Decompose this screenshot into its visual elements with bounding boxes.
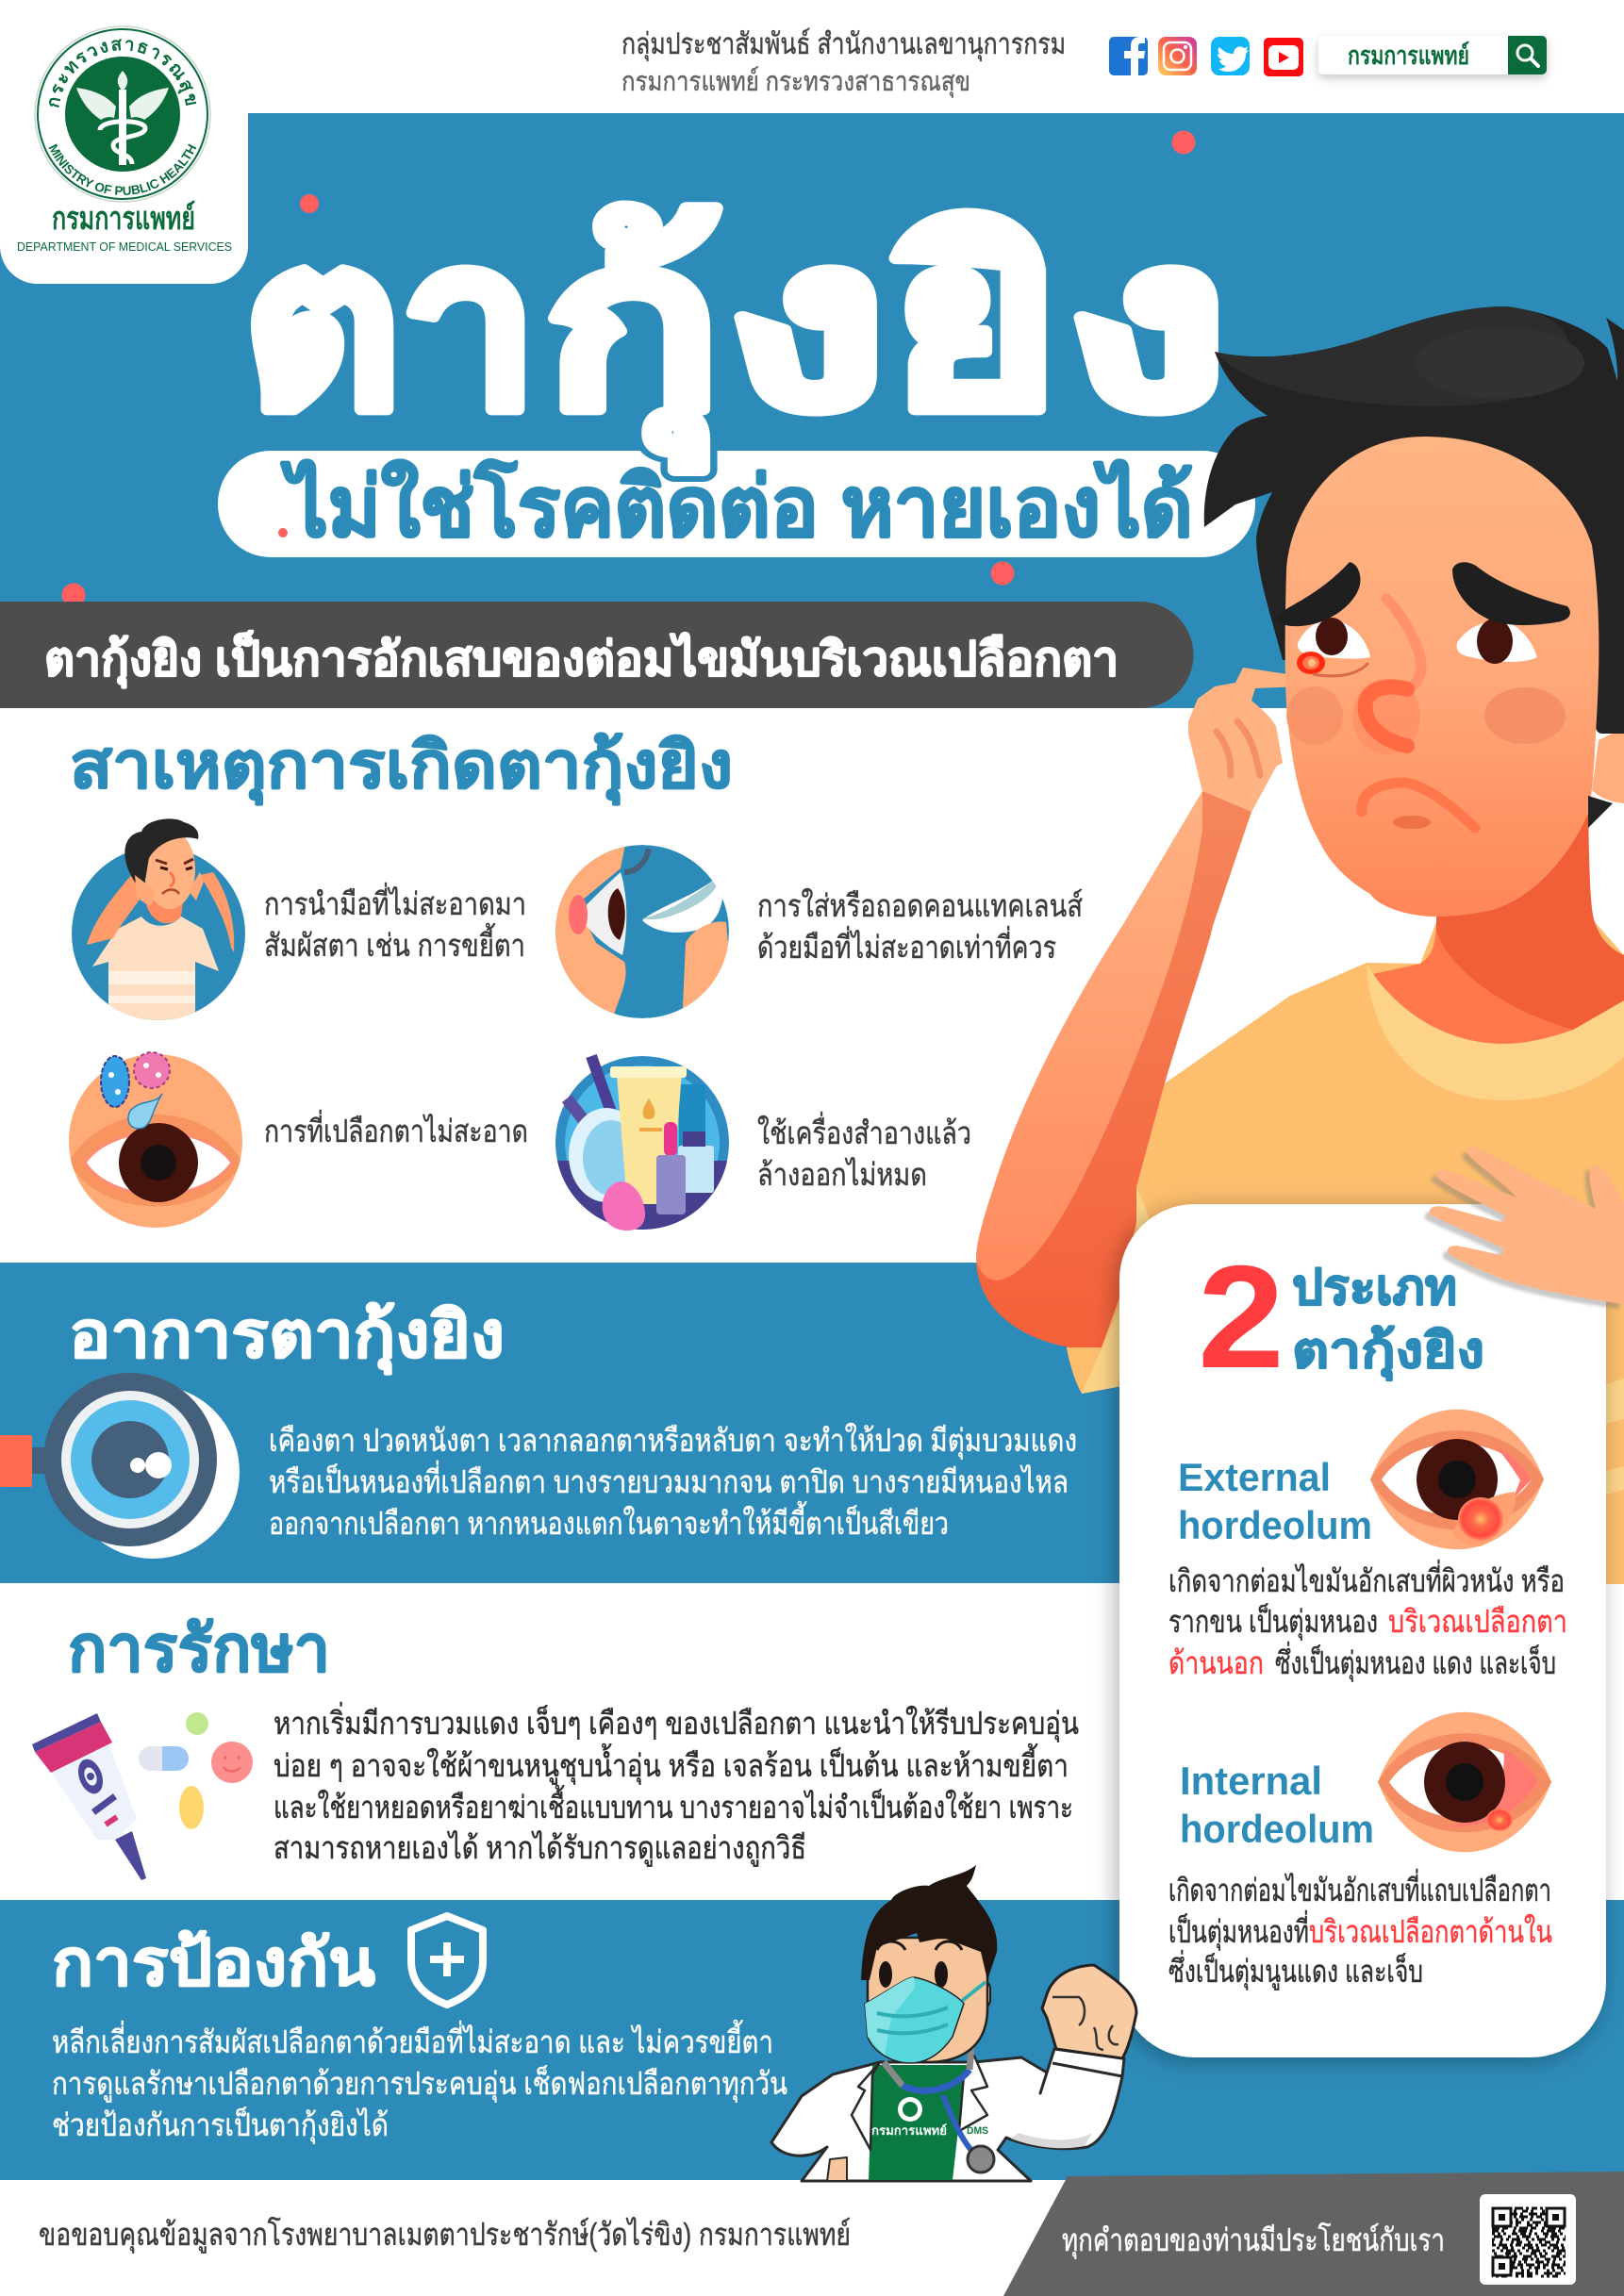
icon: external stye eye	[1370, 1410, 1544, 1549]
footer: credit: ขอขอบคุณข้อมูลจากโรงพยาบาลเมตตาประชารักษ์(วัดไร่ขิง) กรมการแพทย์	[39, 2217, 851, 2254]
eyes	[1298, 620, 1370, 659]
icon: shield plus	[411, 1916, 483, 2005]
label: external: hordeolum	[1178, 1503, 1372, 1547]
title: ง	[726, 193, 887, 455]
header organisation text	[621, 27, 1066, 98]
title: ง	[1066, 193, 1228, 455]
title	[243, 193, 1228, 471]
footer: grey panel: ทุกคำตอบของท่านมีประโยชน์กับเรา	[1062, 2222, 1445, 2259]
panel: two types	[1119, 1204, 1606, 2057]
text: cause 2: ด้วยมือที่ไม่สะอาดเท่าที่ควร	[757, 926, 1056, 965]
social icons	[1109, 37, 1303, 76]
text: treatment: หากเริ่มมีการบวมแดง เจ็บๆ เคืองๆ ของเปลือกตา แนะนำให้รีบประคบอุ่น	[273, 1702, 1079, 1743]
icon: rubbing eyes boy	[72, 818, 245, 1028]
text: prevention	[52, 2020, 787, 2144]
title: ยิ	[892, 193, 1058, 455]
text: prevention: ช่วยป้องกันการเป็นตากุ้งยิงได้	[52, 2106, 389, 2144]
logo panel: DEPARTMENT OF MEDICAL SERVICES	[17, 240, 232, 254]
illustration: doctor with mask: กรมการแพทย์	[871, 2123, 947, 2138]
title: ตา	[243, 193, 538, 455]
text: external description: ด้านนอก	[1168, 1645, 1264, 1680]
section: prevention	[52, 1865, 1136, 2181]
text: cause 1: สัมผัสตา เช่น การขยี้ตา	[264, 923, 525, 963]
text: internal description: ซึ่งเป็นตุ่มนูนแดง และเจ็บ	[1168, 1950, 1423, 1990]
text: symptoms: ออกจากเปลือกตา หากหนองแตกในตาจะทำให้มีขี้ตาเป็นสีเขียว	[269, 1501, 949, 1541]
text: external description: รากขน เป็นตุ่มหนอง	[1168, 1603, 1378, 1641]
heading: types: ตากุ้งยิง	[1292, 1324, 1484, 1381]
surgical mask	[865, 1977, 964, 2063]
header organisation text: กลุ่มประชาสัมพันธ์ สำนักงานเลขานุการกรม	[621, 27, 1066, 62]
icon: contact lens	[555, 845, 729, 1018]
heading: symptoms: อาการตากุ้งยิง	[69, 1299, 505, 1375]
ear	[1592, 728, 1624, 803]
text: treatment: สามารถหายเองได้ หากได้รับการดูแลอย่างถูกวิธี	[273, 1830, 806, 1867]
main character: hand at eye	[1188, 668, 1302, 812]
main character: head	[1204, 306, 1624, 917]
section: causes	[69, 730, 1083, 1231]
logo panel	[0, 25, 248, 284]
logo panel: กรมการแพทย์	[52, 200, 195, 237]
text: cause 4	[757, 1112, 971, 1192]
subtitle pill background	[218, 451, 1255, 557]
text: prevention: การดูแลรักษาเปลือกตาด้วยการประคบอุ่น เช็ดฟอกเปลือกตาทุกวัน	[52, 2065, 787, 2103]
title: กุ้	[545, 193, 721, 471]
text: internal description: บริเวณเปลือกตาด้านใน	[1309, 1914, 1552, 1949]
text: cause 4: ล้างออกไม่หมด	[757, 1157, 927, 1192]
title: ตา	[243, 193, 538, 455]
face	[1285, 437, 1599, 917]
text: cause 3: การที่เปลือกตาไม่สะอาด	[264, 1110, 528, 1148]
definition band: ตากุ้งยิง เป็นการอักเสบของต่อมไขมันบริเวณเปลือกตา	[44, 630, 1119, 688]
text: cause 4: ใช้เครื่องสำอางแล้ว	[757, 1112, 971, 1150]
illustration: doctor with mask	[771, 1865, 1136, 2181]
text: prevention: หลีกเลี่ยงการสัมผัสเปลือกตาด้วยมือที่ไม่สะอาด และ ไม่ควรขยี้ตา	[52, 2020, 773, 2059]
cheeks	[1286, 686, 1343, 745]
text: external description: บริเวณเปลือกตา	[1388, 1604, 1567, 1639]
title: กุ้	[545, 193, 721, 471]
label: external: External	[1178, 1455, 1331, 1499]
text: external description	[1168, 1560, 1567, 1682]
decorative red dots	[62, 130, 1196, 607]
search box: กรมการแพทย์	[1348, 41, 1469, 70]
mouth	[1362, 783, 1475, 828]
label: internal	[1180, 1759, 1374, 1851]
subtitle text: ไม่ใช่โรคติดต่อ หายเองได้	[280, 459, 1193, 553]
brows	[1277, 562, 1361, 626]
illustration: doctor with mask: DMS	[967, 2125, 988, 2137]
coat lapels	[852, 2056, 987, 2150]
section: treatment	[32, 1613, 1079, 1880]
text: treatment: บ่อย ๆ อาจจะใช้ผ้าขนหนูชุบน้ำอุ่น หรือ เจลร้อน เป็นต้น และห้ามขยี้ตา	[273, 1743, 1069, 1785]
search box	[1318, 36, 1547, 74]
hair	[1204, 306, 1624, 734]
section: symptoms	[0, 1299, 1077, 1559]
heading: prevention: การป้องกัน	[52, 1927, 375, 1999]
text: treatment	[273, 1702, 1079, 1867]
text: symptoms	[269, 1423, 1077, 1541]
main character: arm and shirt	[976, 734, 1624, 1584]
qr code	[1480, 2194, 1576, 2285]
germs	[101, 1052, 170, 1129]
number 2: 2	[1198, 1235, 1284, 1398]
text: symptoms: หรือเป็นหนองที่เปลือกตา บางรายบวมมากจน ตาปิด บางรายมีหนองไหล	[269, 1461, 1069, 1499]
icon: cosmetics	[555, 1056, 729, 1231]
label: internal: hordeolum	[1180, 1807, 1374, 1851]
definition band	[0, 602, 1194, 708]
label: external	[1178, 1455, 1372, 1547]
footer: grey panel	[1003, 2172, 1624, 2296]
fist	[1042, 1965, 1136, 2058]
heading: types	[1292, 1261, 1484, 1381]
text: internal description	[1168, 1869, 1552, 1990]
icon: magnifying eye	[0, 1373, 240, 1559]
heading: types: ประเภท	[1292, 1261, 1457, 1315]
heading: causes: สาเหตุการเกิดตากุ้งยิง	[70, 730, 733, 805]
heading: treatment: การรักษา	[68, 1613, 330, 1685]
icon: dirty eyelid	[69, 1052, 242, 1228]
text: treatment: และใช้ยาหยอดหรือยาฆ่าเชื้อแบบทาน บางรายอาจไม่จำเป็นต้องใช้ยา เพราะ	[273, 1785, 1073, 1825]
icon: eye drops and pills	[32, 1712, 253, 1880]
text: cause 1	[264, 883, 526, 963]
main character: hand on chest	[1430, 1148, 1624, 1304]
symptoms band background	[0, 1263, 1624, 1583]
logo panel: MINISTRY OF PUBLIC HEALTH	[49, 143, 196, 195]
stye	[1297, 652, 1325, 674]
title: ยิ	[892, 193, 1058, 455]
text: cause 1: การนำมือที่ไม่สะอาดมา	[264, 883, 526, 921]
text: symptoms: เคืองตา ปวดหนังตา เวลากลอกตาหรือหลับตา จะทำให้ปวด มีตุ่มบวมแดง	[269, 1423, 1077, 1460]
hero blue banner	[0, 113, 1624, 708]
text: internal description: เป็นตุ่มหนองที่	[1168, 1910, 1309, 1951]
icon: internal stye eye	[1378, 1712, 1551, 1852]
title: ง	[726, 193, 887, 455]
nose	[1386, 599, 1421, 692]
logo panel: กระทรวงสาธารณสุข	[49, 39, 196, 107]
text: cause 2: การใส่หรือถอดคอนแทคเลนส์	[757, 888, 1083, 923]
header organisation text: กรมการแพทย์ กระทรวงสาธารณสุข	[621, 66, 970, 98]
label: internal: Internal	[1180, 1759, 1322, 1803]
text: cause 2	[757, 888, 1083, 965]
title: ง	[1066, 193, 1228, 455]
prevention band background	[0, 1900, 1624, 2180]
